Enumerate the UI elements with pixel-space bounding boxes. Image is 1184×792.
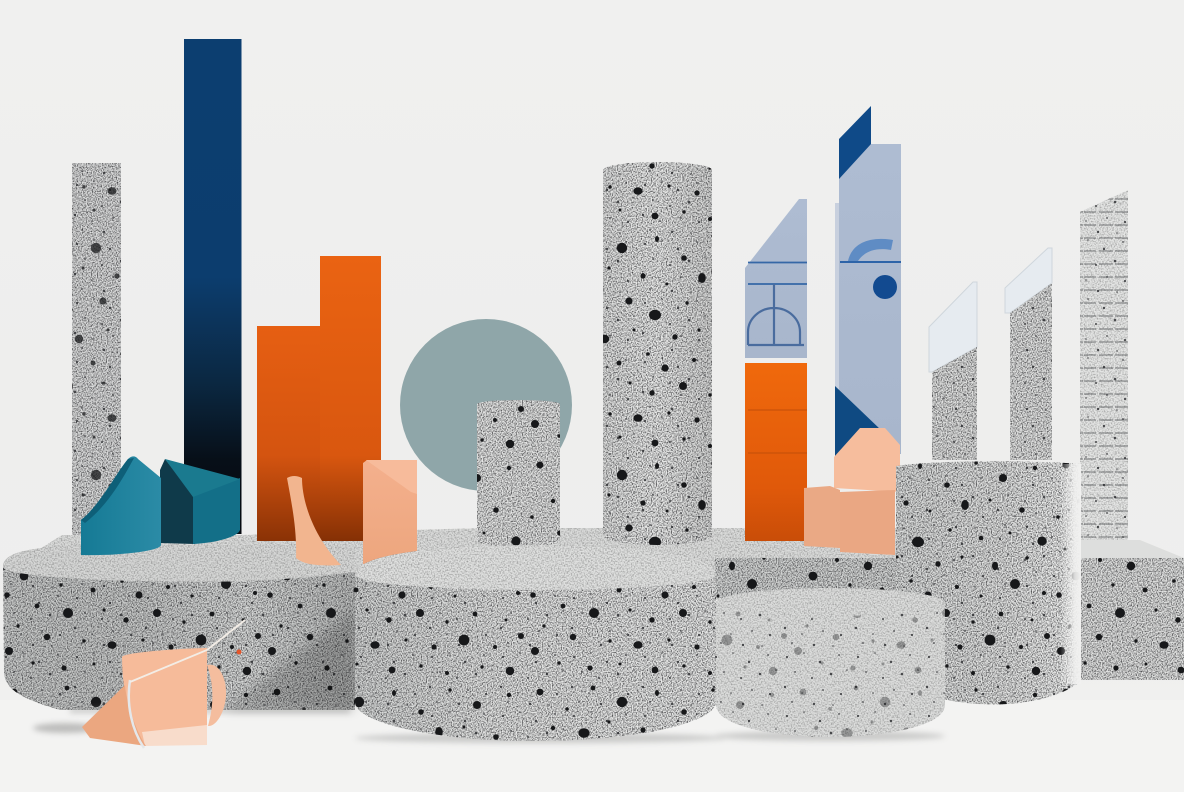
navy bar [184, 39, 242, 534]
floor [0, 700, 1184, 792]
sage disc [400, 319, 572, 491]
big concrete cylinder [603, 162, 712, 545]
orange bars [257, 256, 381, 541]
small peach object in foreground [33, 620, 245, 748]
tall right concrete cylinder [896, 461, 1081, 704]
top surface [716, 588, 945, 616]
striated concrete bar [1080, 190, 1128, 540]
peach crescent [287, 476, 341, 565]
peach block [363, 460, 417, 564]
blue rule [840, 261, 901, 263]
cast shadow band [225, 610, 355, 710]
blue house panel with line art [745, 199, 807, 358]
top surface [355, 545, 716, 590]
navy dot [873, 275, 897, 299]
right concrete block [1080, 540, 1184, 680]
glass-topped concrete bars [929, 248, 1052, 460]
teal house blocks [81, 456, 240, 555]
tall blue panel [835, 106, 901, 456]
bright right edge [1060, 464, 1081, 684]
light blue arc [848, 239, 893, 261]
navy lower triangle [835, 386, 881, 456]
peach step shapes [804, 428, 900, 555]
concrete bar: far left [72, 163, 121, 535]
floor shadows [70, 708, 945, 743]
top surface [3, 545, 355, 582]
orange stacked block [745, 363, 807, 541]
low concrete cylinder [716, 588, 945, 737]
central concrete cylinder [355, 545, 716, 741]
rear platform [35, 528, 1184, 600]
navy top slant [839, 106, 871, 179]
small concrete cylinder [477, 400, 560, 547]
left concrete cylinder [3, 545, 355, 710]
